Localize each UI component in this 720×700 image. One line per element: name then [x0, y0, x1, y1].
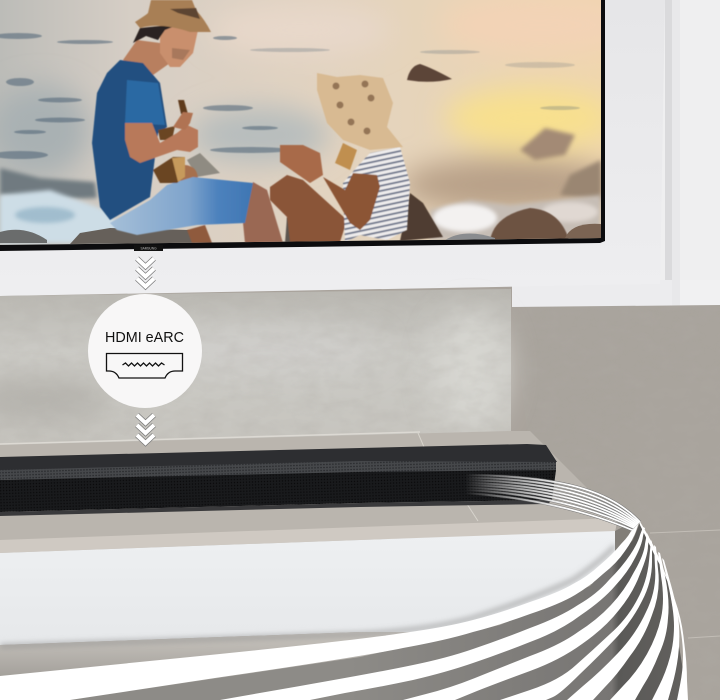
hair	[132, 25, 172, 44]
mid rocks	[520, 128, 575, 160]
TV bezel	[0, 0, 605, 251]
shelf underside	[0, 632, 450, 700]
man knee	[180, 165, 198, 182]
hat	[135, 0, 211, 32]
woman legs	[270, 175, 347, 242]
label: HDMI eARC	[105, 330, 184, 346]
icon: HDMI port	[106, 354, 182, 378]
ribbon 3	[403, 533, 649, 700]
hair	[335, 143, 357, 170]
neck	[123, 40, 170, 75]
rocks left	[0, 230, 47, 243]
shorts	[110, 177, 253, 235]
fading ribbon strands	[465, 475, 640, 530]
ribbon 6	[610, 552, 669, 700]
ribbon 8	[638, 518, 688, 700]
strand shadows	[465, 475, 640, 530]
straw hat	[317, 73, 403, 150]
ukulele	[153, 157, 185, 183]
face	[160, 25, 198, 67]
Samsung logo tab: SAMSUNG	[140, 247, 157, 251]
shelf side shadow	[615, 520, 636, 566]
ribbon 5	[567, 545, 659, 700]
arrow: chevrons from badge to soundbar	[137, 415, 154, 443]
arm	[125, 123, 198, 163]
Samsung logo tab	[134, 245, 163, 251]
strand highlights	[465, 475, 640, 530]
arrow: chevrons from TV to badge	[137, 258, 154, 286]
man far leg	[187, 225, 212, 243]
man	[92, 0, 283, 243]
wall panel	[0, 0, 665, 296]
sound ribbons	[0, 518, 688, 700]
white shelf front	[0, 531, 615, 645]
soundbar top	[0, 444, 557, 472]
ribbon 2	[220, 527, 645, 700]
shirt	[92, 60, 167, 220]
woman arm	[323, 173, 380, 230]
ribbon 7	[652, 558, 679, 700]
clapping hands	[280, 145, 323, 183]
rocks right	[490, 208, 569, 240]
soundbar front	[0, 470, 556, 512]
woman top	[343, 147, 410, 242]
foam left	[0, 190, 135, 243]
foam right	[430, 195, 601, 240]
man leg	[243, 182, 283, 243]
fingers	[173, 112, 193, 130]
far rock	[407, 64, 452, 82]
ribbon 4	[500, 540, 652, 700]
wave band	[0, 168, 97, 200]
HDMI eARC badge	[88, 294, 202, 408]
TV screen photo	[0, 0, 640, 245]
woman	[270, 73, 410, 242]
sea	[0, 0, 601, 245]
marble block	[0, 288, 512, 448]
TV	[0, 0, 640, 251]
ribbon 1	[0, 520, 639, 700]
panel shadow above ribbon	[0, 546, 615, 646]
soundbar	[0, 444, 557, 516]
ribbon base	[70, 522, 688, 700]
stone shelf	[0, 431, 618, 553]
